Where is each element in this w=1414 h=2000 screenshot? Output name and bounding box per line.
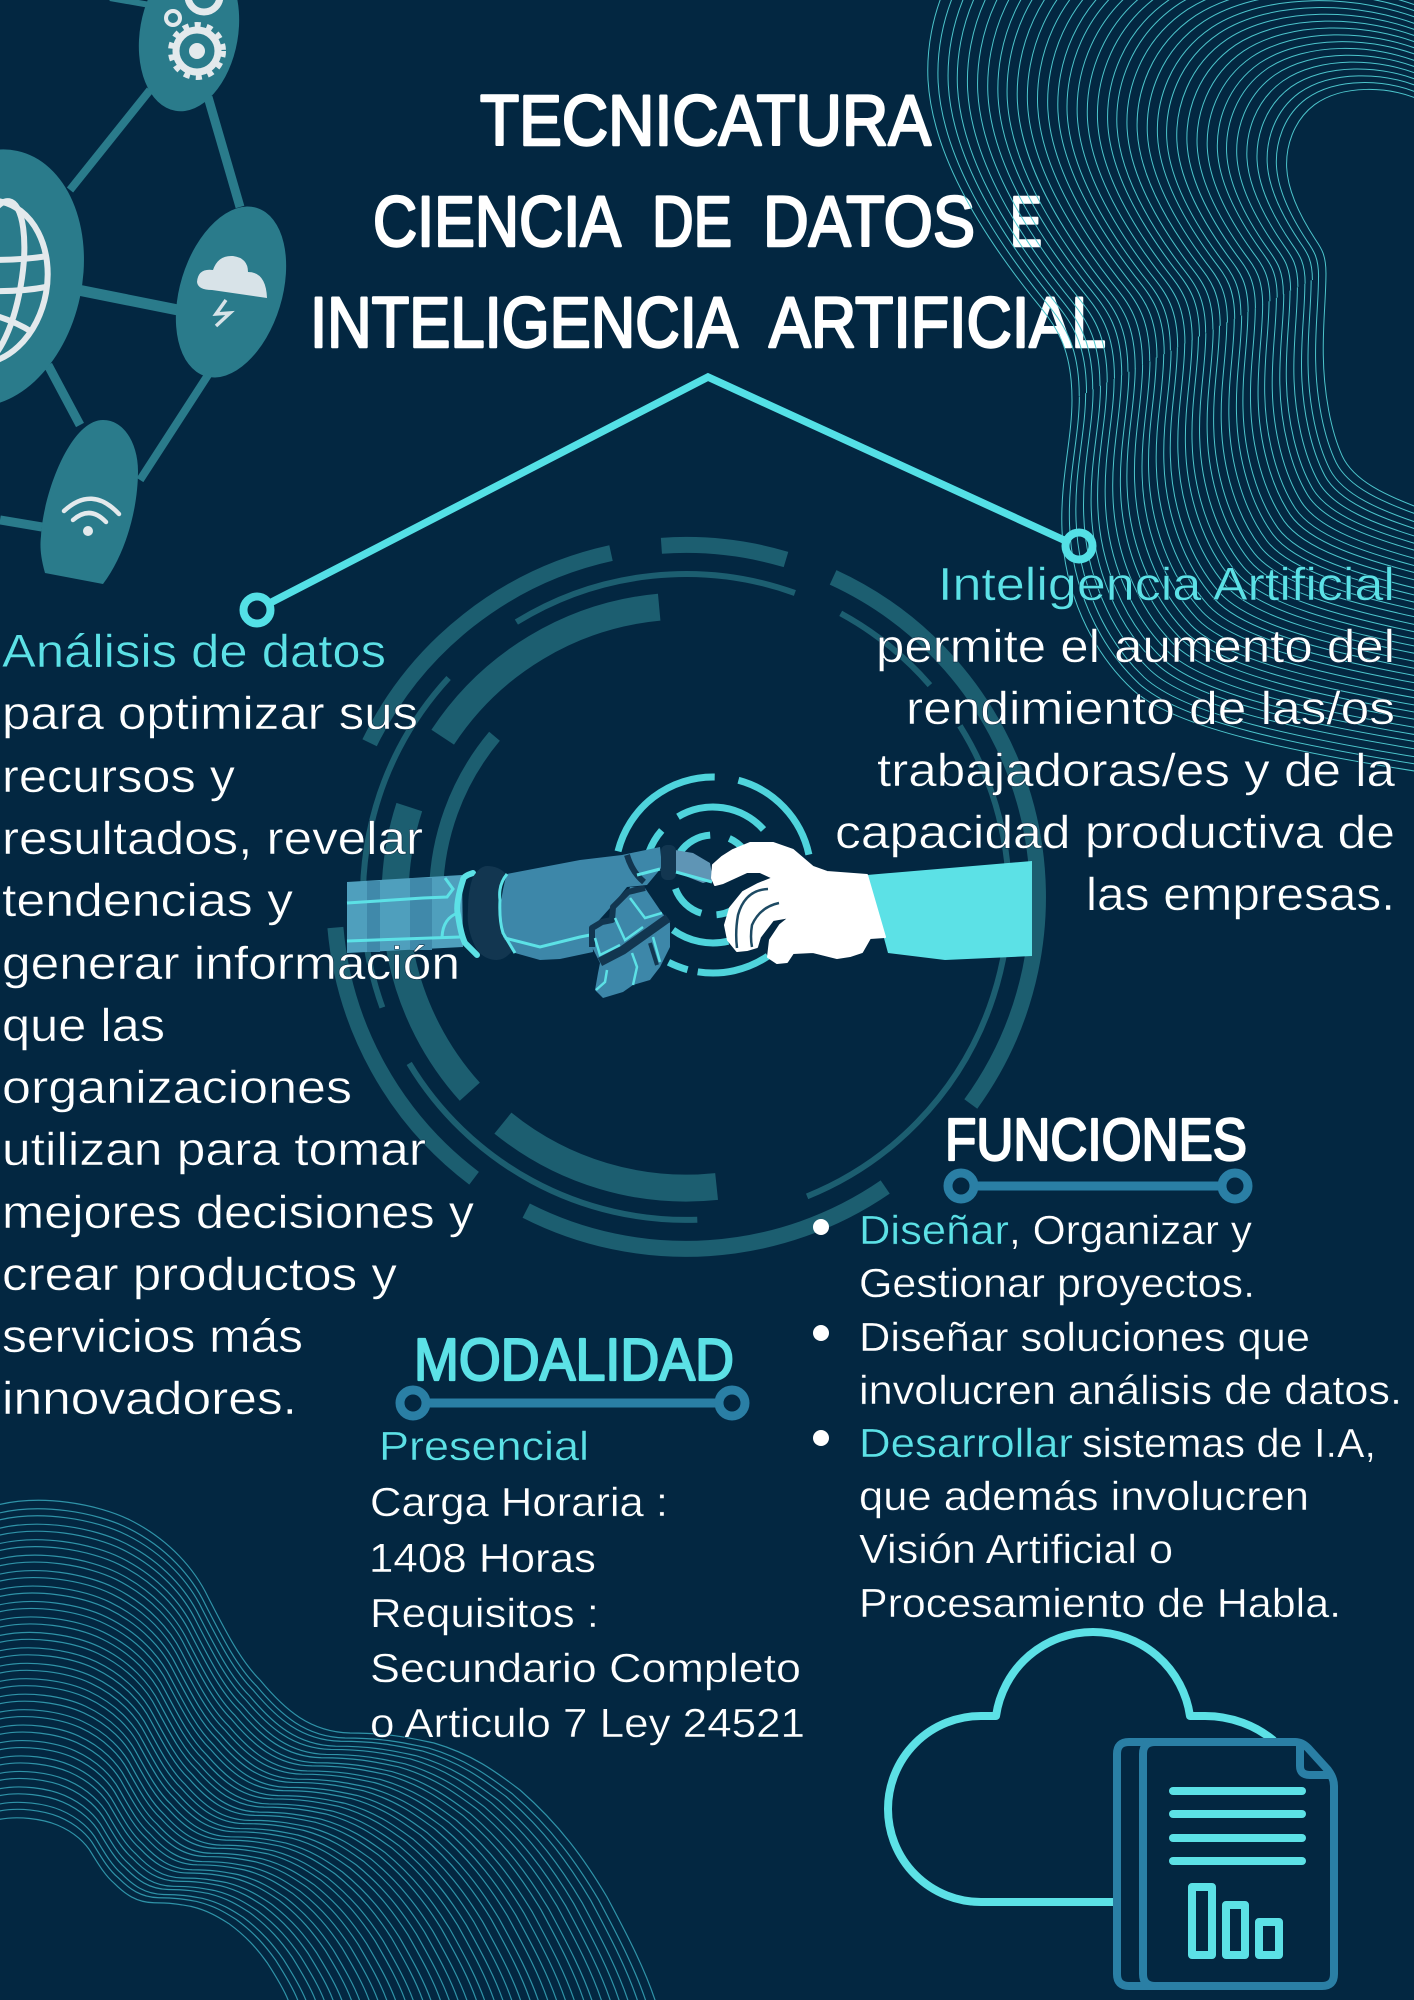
text block: modalidad: Secundario Completo [370,1645,801,1691]
text block: modalidad: 1408 Horas [369,1535,596,1581]
heading: modalidad: MODALIDAD [414,1327,734,1393]
text block: modalidad [369,1423,805,1746]
text block: análisis de datos: para optimizar sus [2,687,418,739]
text block: inteligencia artificial: capacidad productiva de [835,806,1395,858]
text block: análisis de datos: generar información [2,937,460,989]
wave lines: bottom left [0,1500,665,2000]
title: CIENCIA [373,183,622,262]
text block: análisis de datos: organizaciones [2,1061,352,1113]
text block: modalidad: Carga Horaria : [370,1479,668,1525]
white hand [712,843,885,963]
list: funciones: involucren análisis de datos. [859,1367,1402,1413]
text block: análisis de datos: resultados, revelar [2,812,423,864]
roof connector arrows [244,377,1092,624]
list: funciones: sistemas de I.A, [1082,1420,1376,1466]
robot forearm [347,875,463,953]
finger creases [736,889,779,948]
title: DE [652,183,732,262]
list: funciones: que además involucren [859,1473,1309,1519]
list: funciones: Visión Artificial o [859,1526,1173,1572]
text block: análisis de datos: servicios más [2,1310,303,1362]
list: funciones [813,1207,1402,1626]
heading: funciones [945,1107,1248,1199]
icon: cloud with document [888,1632,1334,1986]
text block: análisis de datos: innovadores. [2,1372,297,1424]
text block: análisis de datos: tendencias y [2,874,293,926]
title: ARTIFICIAL [769,284,1106,363]
text block: análisis de datos: recursos y [2,750,235,802]
robot hand [347,845,713,998]
node: wifi [40,420,138,584]
text block: análisis de datos: Análisis de datos [2,625,386,677]
network illustration: top left [0,0,306,584]
document text lines [1173,1791,1302,1861]
robot finger joints [627,845,712,882]
list bullets [813,1219,829,1446]
text block: inteligencia artificial: Inteligencia Artificial [938,558,1395,610]
text block: análisis de datos: crear productos y [2,1248,397,1300]
robot fingertip [675,850,713,883]
text block: modalidad: Presencial [379,1423,589,1469]
heading: funciones: FUNCIONES [945,1107,1247,1173]
human hand [712,843,1032,963]
cyan cuff crescent [457,873,477,955]
robot palm [501,847,662,960]
document outline [1117,1742,1334,1986]
title: INTELIGENCIA [310,284,739,363]
title: DATOS [763,183,975,262]
cloud outline [888,1632,1273,1902]
network connectors [0,0,240,527]
text block: inteligencia artificial: rendimiento de las/os [906,682,1395,734]
text block: análisis de datos: utilizan para tomar [2,1123,426,1175]
text block: análisis de datos: mejores decisiones y [2,1186,474,1238]
sleeve [867,861,1032,960]
text block: inteligencia artificial: permite el aumento del [876,620,1395,672]
title: TECNICATURA [480,82,932,161]
text block: inteligencia artificial [835,558,1395,920]
title [310,82,1106,363]
text block: análisis de datos: que las [2,999,165,1051]
list: funciones: Desarrollar [859,1420,1073,1466]
node: gears [127,0,251,119]
text block: modalidad: Requisitos : [370,1590,599,1636]
palm circuit line [500,874,590,953]
text block: inteligencia artificial: trabajadoras/es y de la [877,744,1395,796]
node: cloud and lightning [156,193,306,391]
list: funciones: Gestionar proyectos. [859,1260,1255,1306]
target rings behind the hands [618,777,809,973]
heading: modalidad [400,1327,745,1416]
robot curled fingers [592,887,670,998]
list: funciones: , Organizar y [1009,1207,1253,1253]
list: funciones: Diseñar [859,1207,1009,1253]
concentric tech rings [335,545,1038,1249]
text block: análisis de datos [2,625,474,1424]
document bar chart [1192,1887,1279,1955]
title: E [1010,183,1042,262]
wave lines: top right [928,0,1414,775]
text block: modalidad: o Articulo 7 Ley 24521 [370,1700,805,1746]
list: funciones: Diseñar soluciones que [859,1314,1310,1360]
node: globe [0,132,107,424]
text block: inteligencia artificial: las empresas. [1086,868,1395,920]
list: funciones: Procesamiento de Habla. [859,1580,1341,1626]
robot cuff [468,866,513,960]
